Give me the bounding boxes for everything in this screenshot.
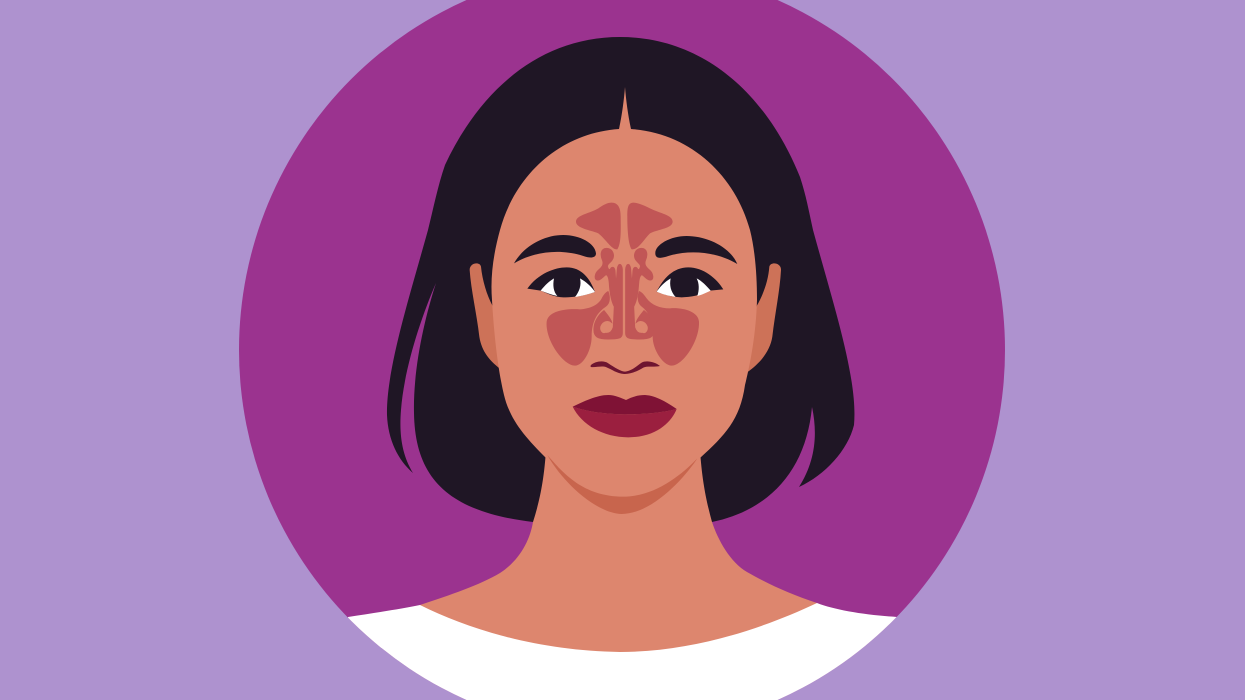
nose [591, 361, 660, 374]
hair [387, 37, 854, 522]
purple circle [239, 0, 1005, 700]
left ear [470, 263, 503, 371]
frontal sinus left [576, 203, 621, 249]
lips [573, 395, 677, 437]
nasal passages left [594, 248, 622, 339]
sinuses, eyes, brows and nose [514, 203, 737, 374]
left eye [527, 267, 595, 297]
right eye [657, 267, 723, 297]
right eyebrow [655, 236, 737, 264]
face [491, 87, 757, 497]
shirt [340, 603, 900, 700]
lower lip [573, 407, 677, 437]
neck and shoulders [420, 450, 817, 652]
sinuses [547, 203, 699, 366]
illustration: woman with highlighted sinuses [239, 0, 1005, 700]
chin shadow [547, 455, 697, 514]
frontal sinus right [627, 203, 673, 249]
right ear [747, 263, 781, 373]
maxillary right [638, 291, 699, 366]
maxillary left [547, 291, 610, 366]
upper lip [573, 395, 677, 414]
left eyebrow [514, 235, 596, 263]
nasal passages right [626, 248, 654, 339]
